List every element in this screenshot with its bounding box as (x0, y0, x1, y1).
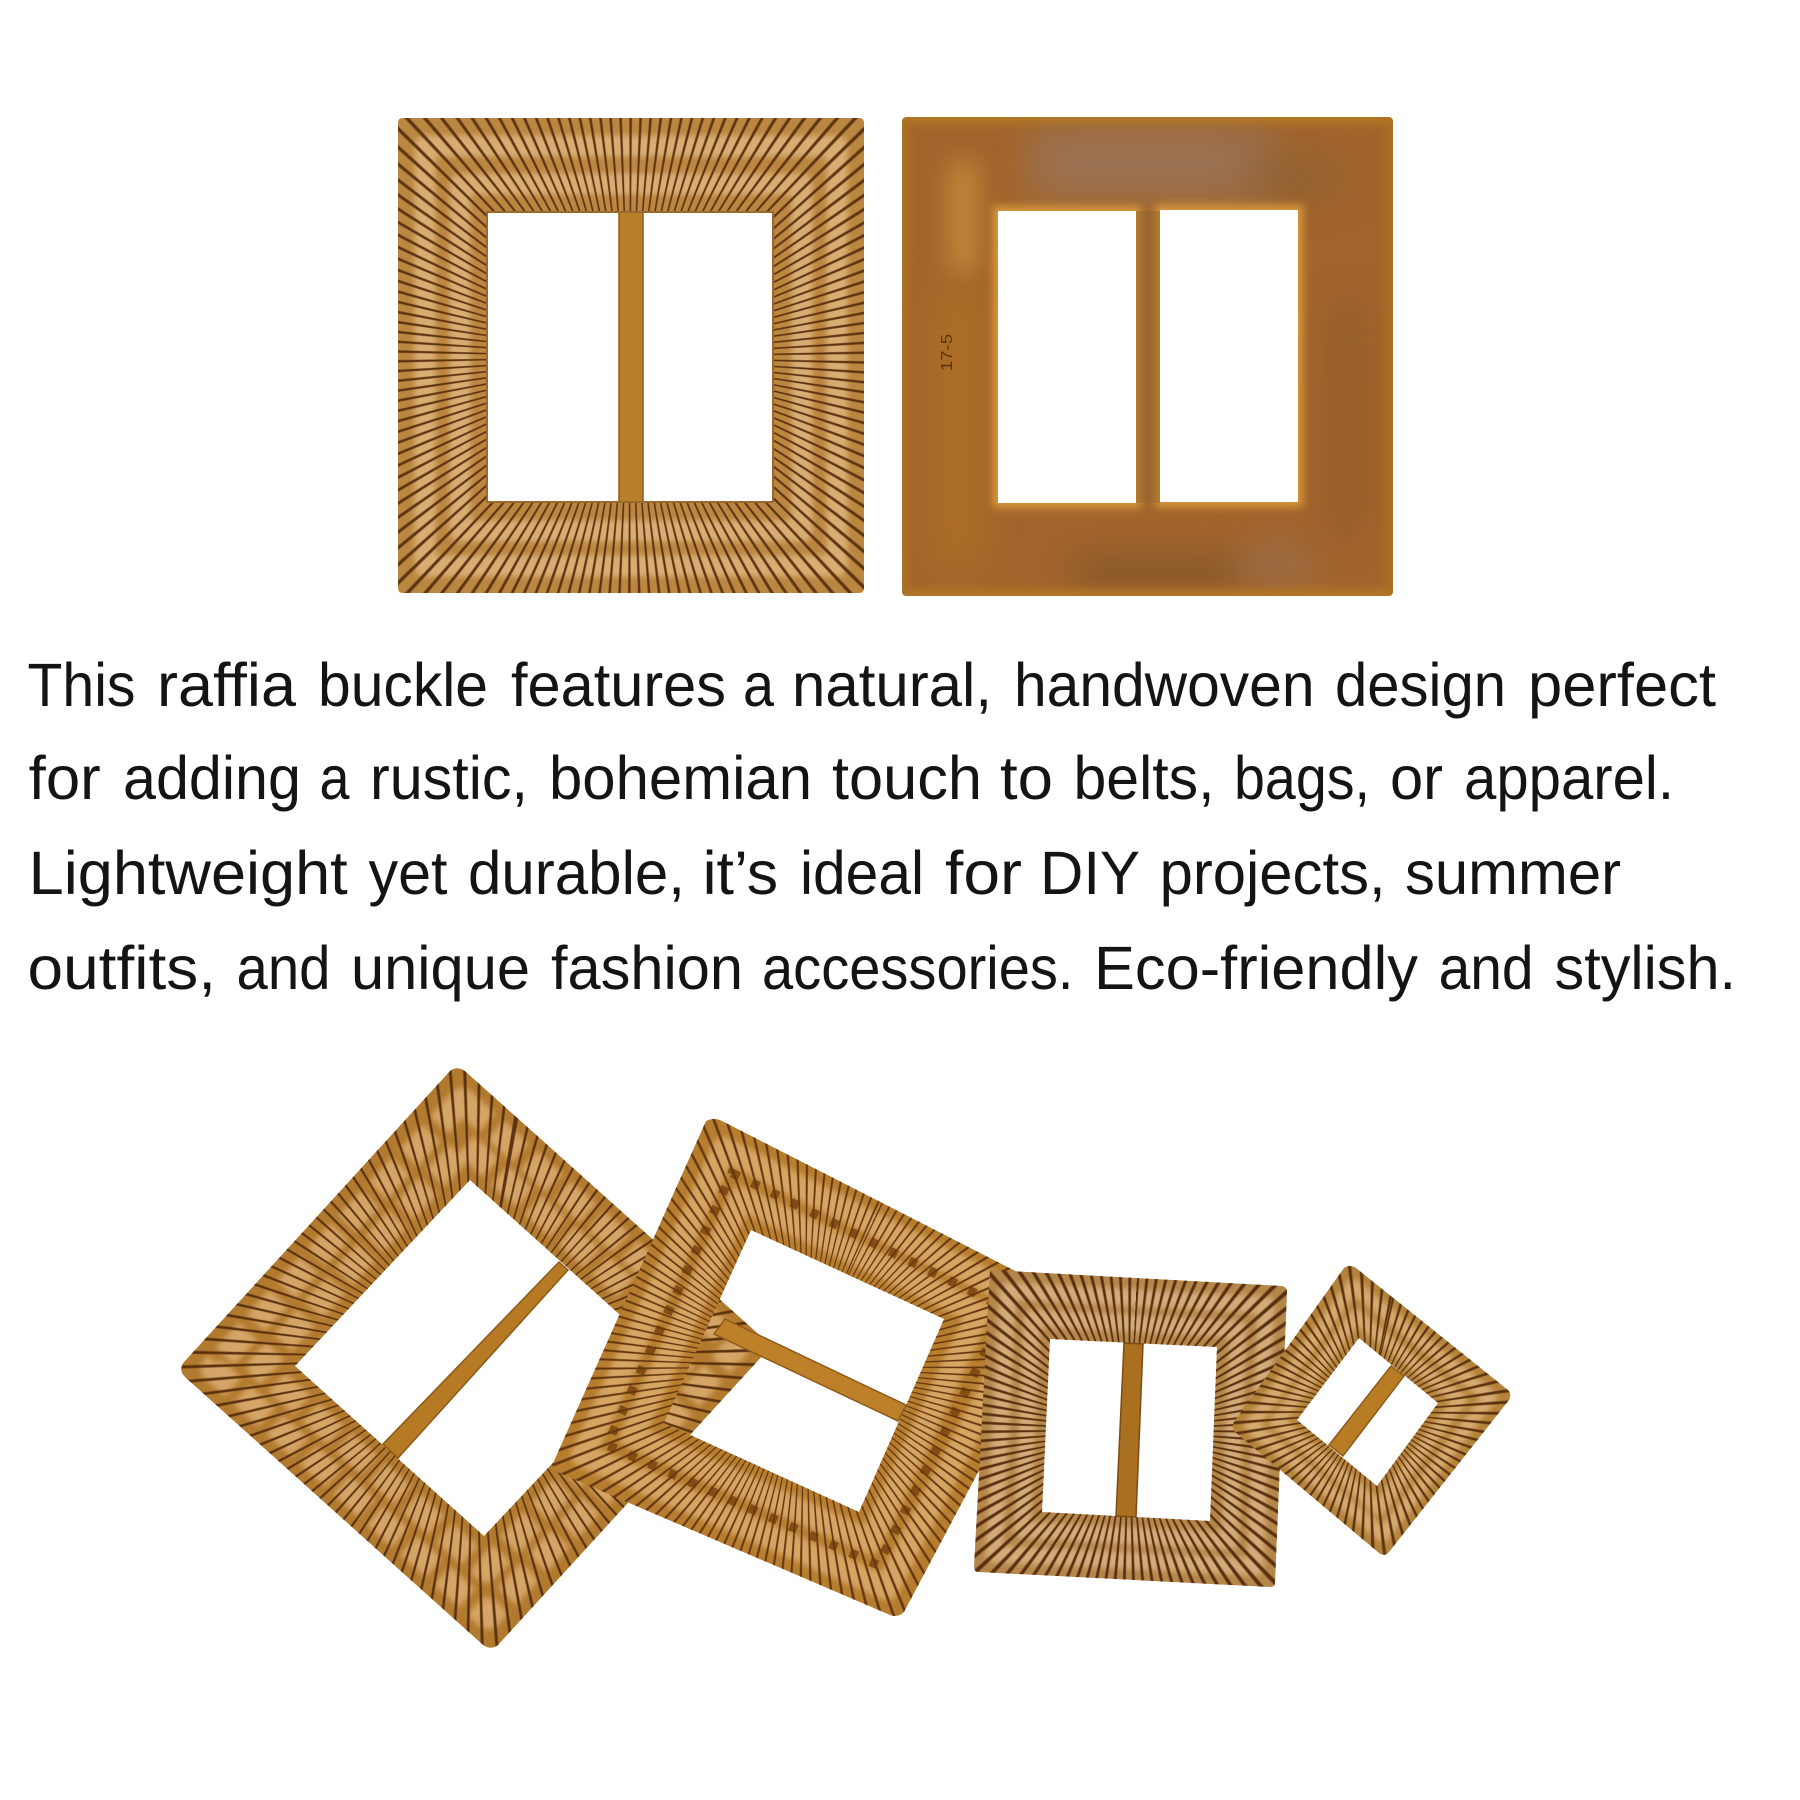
text line 2: belts, (1074, 744, 1214, 812)
text line 2: adding (123, 744, 301, 812)
text line 2: or (1390, 744, 1443, 812)
text line 1 (28, 651, 1716, 719)
text line 1: perfect (1528, 651, 1716, 719)
text line 3: ideal (800, 839, 924, 907)
description text (28, 651, 1736, 1002)
buckle D slider bar (1328, 1365, 1405, 1457)
text line 2: bohemian (549, 744, 812, 812)
text line 4: accessories. (762, 934, 1074, 1002)
text line 4: and (236, 934, 330, 1002)
centre divider bar (1136, 211, 1160, 503)
text line 4: Eco-friendly (1094, 934, 1418, 1002)
buckle centre bar (486, 211, 774, 503)
text line 1: natural, (792, 651, 992, 719)
text line 3: Lightweight (29, 839, 348, 907)
text line 3: it’s (703, 839, 778, 907)
text line 4 (28, 934, 1736, 1002)
text line 4: stylish. (1554, 934, 1736, 1002)
product photo: smooth buckle back (902, 117, 1393, 596)
text line 2 (29, 744, 1674, 812)
text line 4: fashion (551, 934, 743, 1002)
text line 2: a (320, 744, 350, 812)
text line 2: touch (832, 744, 982, 812)
text line 1: handwoven (1014, 651, 1314, 719)
text line 3: durable, (468, 839, 685, 907)
text line 3: projects, (1160, 839, 1386, 907)
buckle B: rotated overlapping frame (553, 1119, 1016, 1616)
text line 1: raffia (157, 651, 296, 719)
text line 4: and (1439, 934, 1534, 1002)
text line 4: outfits, (28, 934, 216, 1002)
text line 1: This (28, 651, 136, 719)
buckle B slider bar (713, 1318, 907, 1422)
text line 3: yet (368, 839, 448, 907)
buckle A: largest, rotated diamond (181, 1068, 762, 1648)
buckle D: smallest, rotated diamond (1232, 1266, 1510, 1555)
product photo: woven raffia buckle front (398, 118, 864, 593)
text line 1: design (1335, 651, 1506, 719)
text line 2: to (1000, 744, 1053, 812)
text line 3: summer (1405, 839, 1621, 907)
text line 1: buckle (318, 651, 488, 719)
buckle A slider bar (382, 1261, 569, 1459)
text line 4: unique (351, 934, 530, 1002)
text line 3: DIY (1040, 839, 1140, 907)
text line 1: features (511, 651, 726, 719)
text line 2: apparel. (1464, 744, 1674, 812)
text line 2: for (29, 744, 101, 812)
buckle C slider bar (1115, 1342, 1144, 1518)
text line 1: a (743, 651, 774, 719)
text line 2: rustic, (370, 744, 528, 812)
text line 3 (29, 839, 1621, 907)
text line 2: bags, (1234, 744, 1370, 812)
text line 3: for (945, 839, 1022, 907)
buckle C: medium, nearly upright frame (974, 1270, 1287, 1587)
engraved size mark: 17-5 (939, 334, 956, 371)
